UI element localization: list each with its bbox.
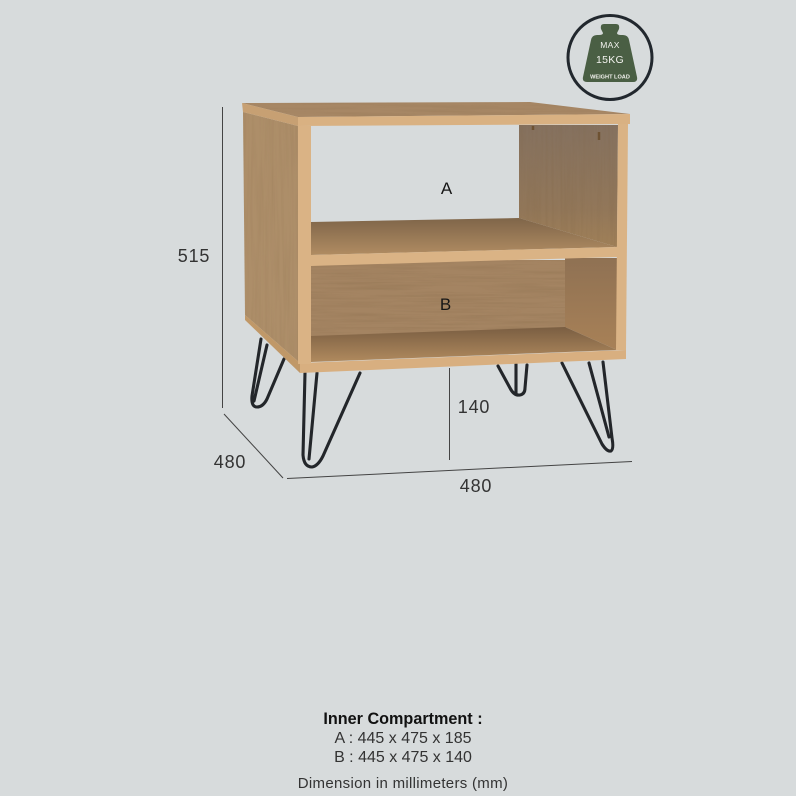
lower compartment back panel xyxy=(311,260,566,336)
left stile xyxy=(298,126,311,364)
leg height dimension: 140 xyxy=(458,397,490,417)
shelf top surface xyxy=(311,218,617,255)
side panel xyxy=(243,112,300,373)
weight load badge xyxy=(568,16,652,100)
front left leg xyxy=(303,373,360,467)
shelf front edge xyxy=(311,247,617,266)
compartment label B: B xyxy=(440,295,451,314)
weight load badge: MAX xyxy=(600,40,620,50)
compartment A size: A : 445 x 475 x 185 xyxy=(334,730,472,747)
table top front edge xyxy=(298,114,630,126)
table top surface xyxy=(242,102,630,117)
upper compartment inner side xyxy=(519,125,618,247)
leg height dimension xyxy=(450,368,490,460)
width dimension xyxy=(287,462,632,496)
icon: weight xyxy=(583,24,637,82)
depth dimension: 480 xyxy=(214,452,246,472)
table top left edge xyxy=(242,103,298,126)
bottom floor xyxy=(311,327,617,362)
width dimension: 480 xyxy=(460,476,492,496)
weight load badge: WEIGHT LOAD xyxy=(590,74,630,80)
back left leg xyxy=(252,339,284,407)
bottom rail xyxy=(300,350,626,373)
front right leg xyxy=(562,362,613,451)
weight load badge: 15KG xyxy=(596,54,624,66)
height dimension: 515 xyxy=(178,246,210,266)
compartment B size: B : 445 x 475 x 140 xyxy=(334,749,472,766)
lower compartment inner side xyxy=(565,258,617,350)
inner compartment notes xyxy=(298,710,508,792)
notes heading: Inner Compartment : xyxy=(323,710,483,728)
bracket details xyxy=(533,126,599,140)
right stile xyxy=(616,124,628,350)
compartment label A: A xyxy=(441,179,453,198)
hairpin legs xyxy=(252,339,613,467)
units note: Dimension in millimeters (mm) xyxy=(298,775,508,792)
table body xyxy=(242,102,630,373)
depth dimension xyxy=(214,414,283,478)
back centre leg xyxy=(498,364,527,395)
